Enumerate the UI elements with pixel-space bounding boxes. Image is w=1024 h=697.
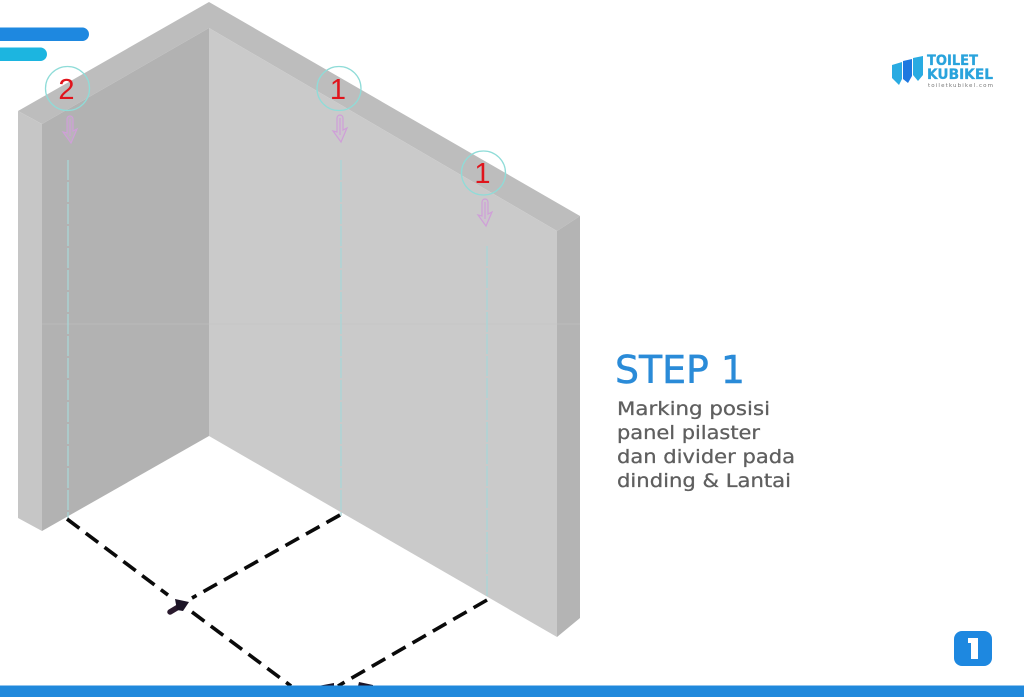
arrow down 1 right [478, 199, 492, 226]
corner walls illustration [18, 2, 580, 637]
marker 2 [46, 66, 90, 110]
right wall end face [557, 216, 580, 637]
floor corner marker [170, 599, 189, 612]
header accent bars [0, 28, 89, 61]
marker 1 center: 1 [330, 74, 346, 106]
description text: panel pilaster [617, 422, 760, 444]
vertical marking lines [68, 160, 487, 598]
description text [617, 398, 795, 492]
bottom partial floor marker [318, 682, 373, 686]
bottom bar [0, 686, 1024, 697]
arrow down 2 [63, 116, 77, 143]
logo wordmark [927, 53, 993, 83]
logo wordmark: KUBIKEL [927, 67, 993, 83]
marker 2: 2 [58, 74, 75, 106]
floor dashed marking lines [67, 515, 487, 686]
left wall end face [18, 111, 42, 531]
description text: Marking posisi [617, 398, 770, 420]
left wall inner face [42, 28, 209, 531]
marker 1 right [462, 151, 506, 195]
arrow down 1 center [333, 115, 347, 142]
page number badge [954, 631, 992, 666]
right wall inner face [209, 28, 557, 637]
logo icon [892, 56, 923, 85]
logo wordmark: TOILET [927, 53, 978, 69]
heading: step 1: STEP 1 [615, 348, 745, 392]
logo: toilet kubikel [892, 53, 993, 89]
wall top face [18, 2, 580, 231]
description text: dan divider pada [617, 446, 795, 468]
marker 1 center [317, 66, 361, 110]
marker 1 right: 1 [474, 158, 491, 190]
description text: dinding & Lantai [617, 470, 791, 492]
logo url: toiletkubikel.com [928, 83, 993, 89]
